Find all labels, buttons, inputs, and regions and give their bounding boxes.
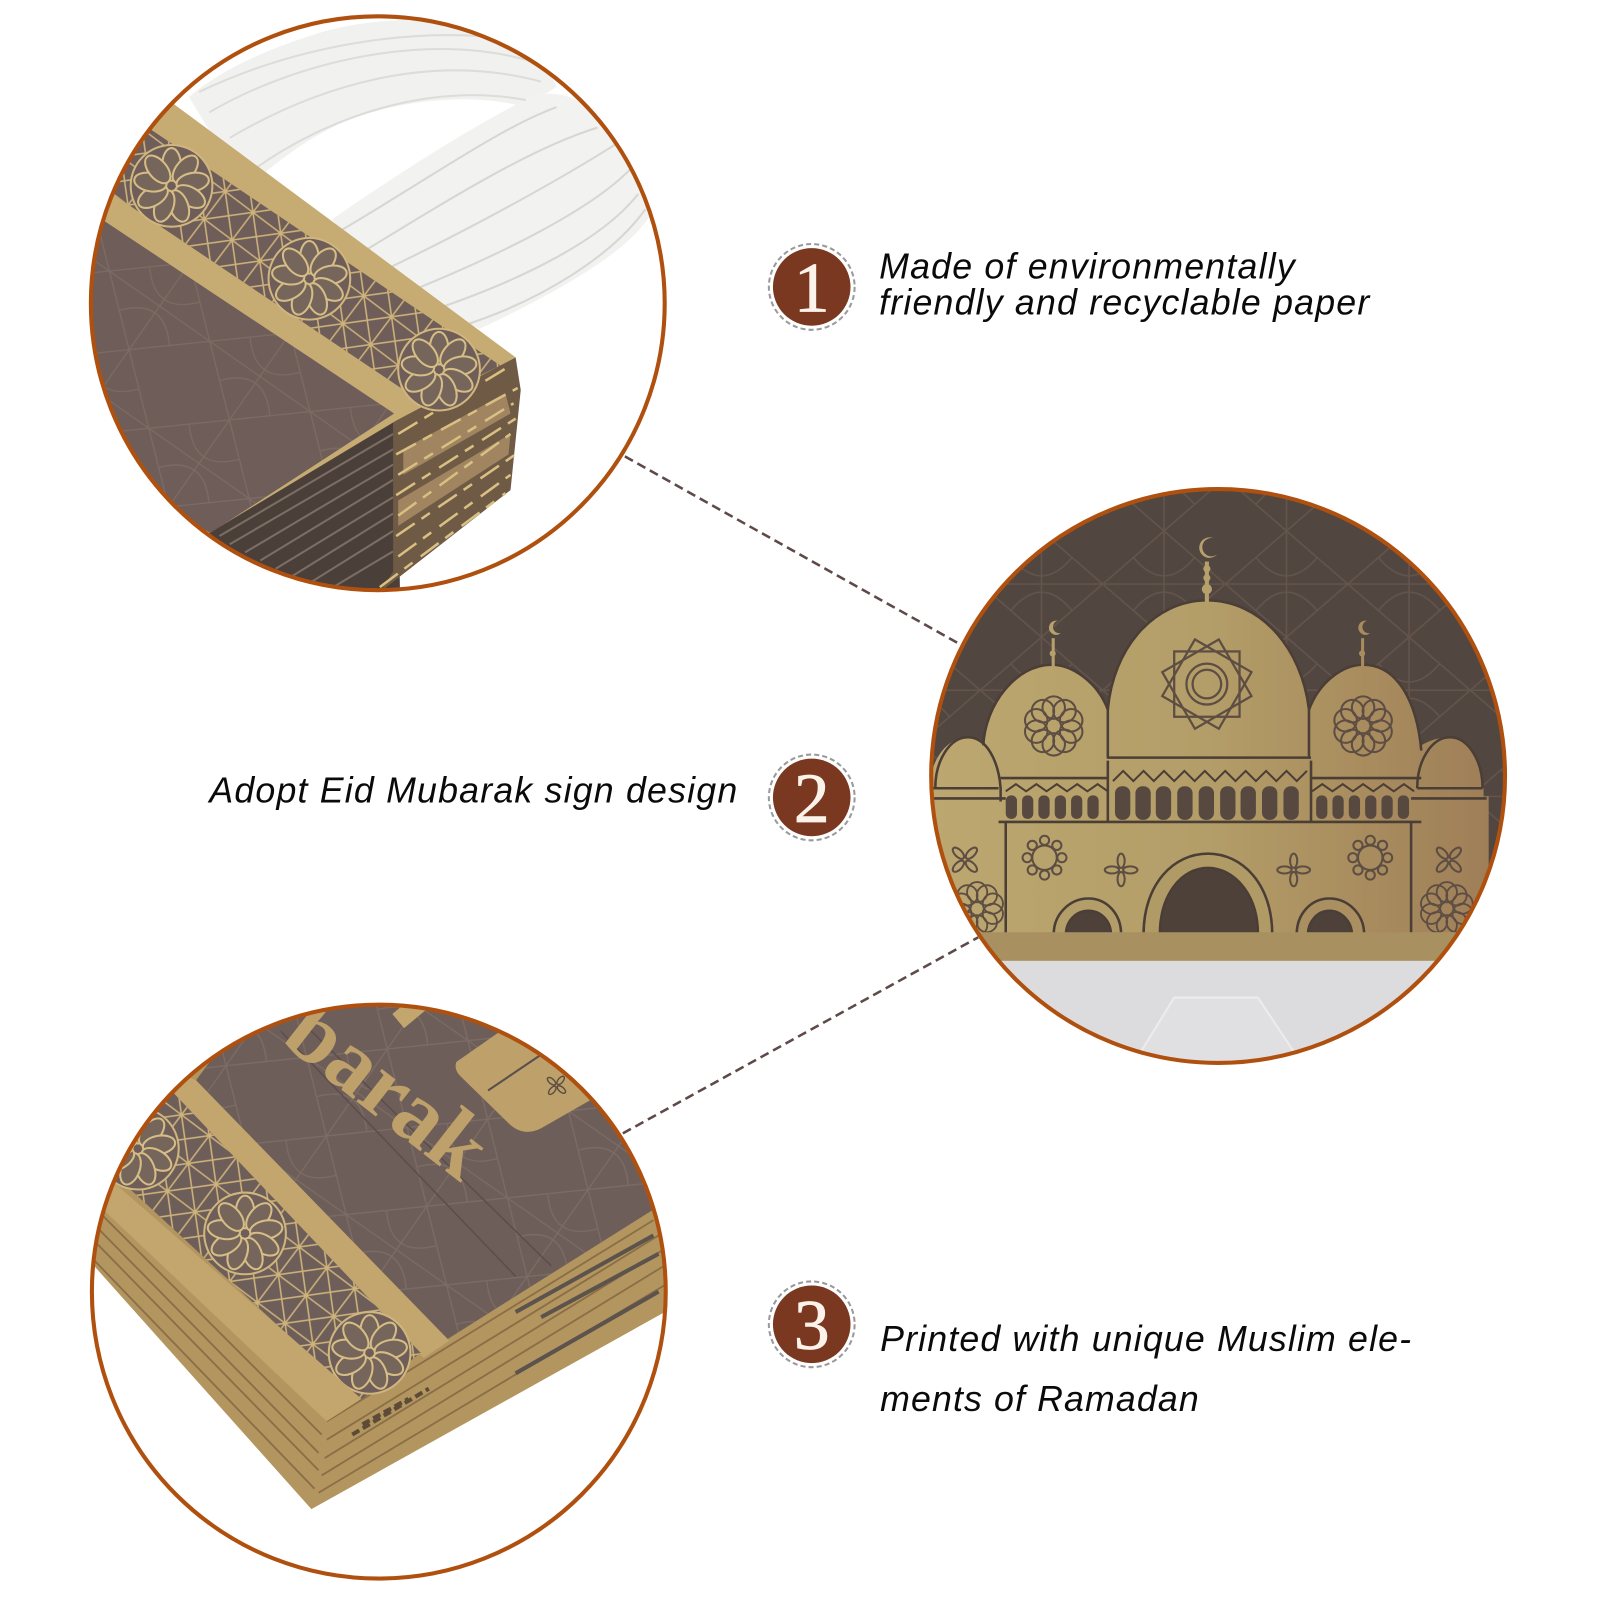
paper handles	[189, 20, 653, 329]
stack lines	[92, 1210, 666, 1493]
bag front: kraft	[71, 100, 516, 533]
finial: main dome	[1199, 537, 1217, 602]
main dome rosette	[1162, 639, 1252, 729]
badge 1	[769, 244, 855, 330]
gallery arches	[1006, 786, 1409, 820]
side sheets: grey edges	[516, 1235, 659, 1373]
lower kraft strip	[106, 1184, 362, 1422]
caption 2: Adopt Eid Mubarak sign design	[207, 771, 737, 811]
mosque outlines	[933, 600, 1487, 934]
finial: right dome	[1358, 621, 1370, 667]
badge 2	[769, 755, 855, 840]
caption 1: friendly and recyclable paper	[879, 282, 1371, 322]
zigzag trim	[1006, 771, 1414, 791]
bag stack: gold edges	[380, 357, 521, 592]
doorways	[1054, 854, 1364, 934]
caption 1: Made of environmentally	[879, 247, 1297, 287]
finial: left dome	[1049, 621, 1061, 667]
panel: circle 2, mosque design	[924, 480, 1516, 1072]
badge 1: 1	[794, 248, 830, 327]
label ornament	[546, 1076, 566, 1096]
panel: circle 3, stacked bags with lettering	[71, 979, 674, 1588]
label upper tab	[392, 1008, 425, 1028]
kraft ledge	[980, 932, 1456, 961]
bag stack: kraft patches	[398, 393, 511, 526]
kraft label	[456, 1033, 590, 1132]
bag stack: dark side	[210, 422, 400, 588]
connector: bottom circle to middle circle	[623, 937, 978, 1133]
upper kraft strip	[174, 1078, 449, 1358]
bag stack: side lines	[220, 434, 393, 592]
bag front: patterned band	[112, 128, 500, 403]
badge 3: 3	[794, 1286, 830, 1365]
caption 3: ments of Ramadan	[880, 1379, 1199, 1419]
caption 3	[880, 1319, 1411, 1419]
dark mottling on stack	[352, 1389, 429, 1435]
badge 3	[769, 1281, 855, 1367]
connector: top circle to middle circle	[625, 456, 962, 645]
acrylic stand	[1141, 996, 1294, 1051]
panel: circle 1, paper handles and bag stack	[61, 12, 669, 602]
mosque silhouette	[929, 600, 1489, 934]
brown face	[196, 1006, 652, 1339]
wall ornaments	[942, 836, 1475, 936]
circle 2 outline	[931, 489, 1505, 1063]
stacked kraft body	[95, 1062, 664, 1510]
caption 3: Printed with unique Muslim ele-	[880, 1319, 1411, 1359]
fold line	[281, 1026, 551, 1276]
lettering: barak	[267, 979, 509, 1199]
circle 3 outline	[92, 1005, 666, 1579]
white bag body	[1001, 960, 1435, 1050]
caption 1	[879, 247, 1371, 322]
circle 1 outline	[91, 16, 665, 590]
patterned band	[131, 1094, 420, 1401]
bag stack: gold strands	[380, 366, 518, 587]
side dome rosettes	[1022, 695, 1395, 757]
bag front: brown face	[92, 222, 394, 533]
badge 2: 2	[794, 759, 830, 838]
